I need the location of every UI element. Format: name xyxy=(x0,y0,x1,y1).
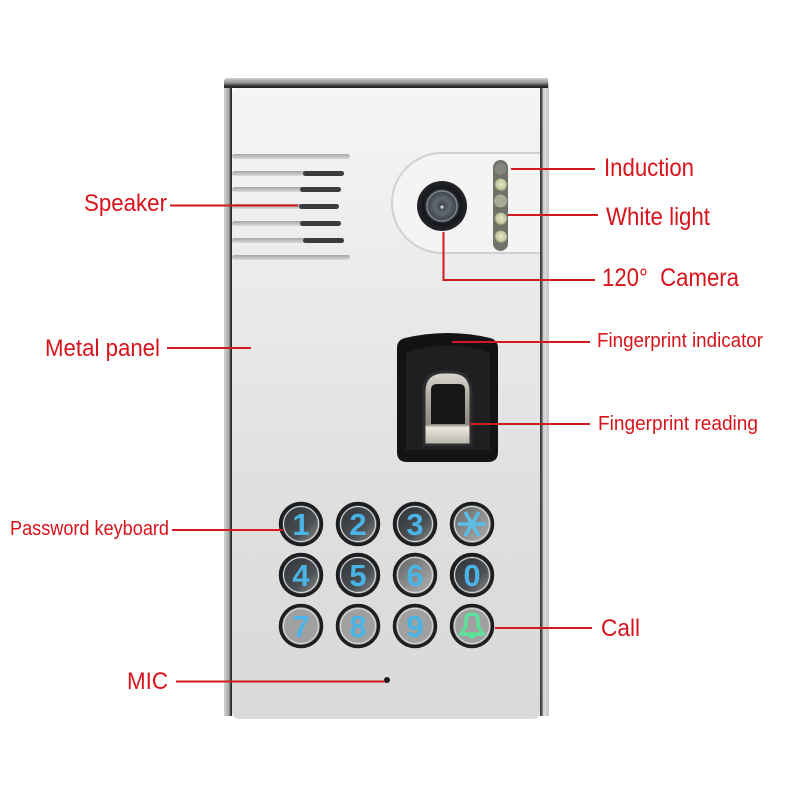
key 9: 9 xyxy=(406,609,424,644)
icon: camera lens xyxy=(417,181,467,231)
device housing frame xyxy=(224,78,549,716)
label: White light: White light xyxy=(606,203,710,231)
key 5 xyxy=(338,554,378,596)
camera bezel xyxy=(392,153,540,253)
metal panel xyxy=(232,88,540,719)
key 1 xyxy=(280,504,322,544)
fingerprint sensor xyxy=(424,372,471,445)
key call bell xyxy=(452,606,492,646)
label: Speaker: Speaker xyxy=(84,190,167,217)
key 0 xyxy=(452,554,492,596)
key 8: 8 xyxy=(349,609,367,644)
key 3 xyxy=(394,504,436,544)
password keypad xyxy=(280,504,492,646)
fingerprint reader xyxy=(397,333,498,462)
label: 120 degree camera: 120° Camera xyxy=(602,264,739,292)
speaker grille xyxy=(232,154,350,260)
label: Call: Call xyxy=(601,615,640,642)
key 7 xyxy=(280,606,322,646)
key 9 xyxy=(394,606,436,646)
LED strip xyxy=(493,160,508,251)
label: Fingerprint reading: Fingerprint reading xyxy=(598,413,758,435)
key 1: 1 xyxy=(292,507,310,542)
key 6: 6 xyxy=(406,558,424,593)
key star xyxy=(452,504,492,544)
icon: microphone hole xyxy=(384,677,390,683)
label: MIC: MIC xyxy=(127,668,168,695)
label: Metal panel: Metal panel xyxy=(45,335,160,362)
key 4: 4 xyxy=(292,558,310,593)
key 3: 3 xyxy=(406,507,424,542)
key 6 xyxy=(394,554,436,596)
key 5: 5 xyxy=(349,558,367,593)
label: Induction: Induction xyxy=(604,154,694,182)
key 2: 2 xyxy=(349,507,367,542)
key 7: 7 xyxy=(292,609,310,644)
key 0: 0 xyxy=(463,558,481,593)
key 8 xyxy=(338,606,378,646)
leader lines xyxy=(167,169,598,682)
key 4 xyxy=(280,554,322,596)
key 2 xyxy=(338,504,378,544)
label: Fingerprint indicator: Fingerprint indicator xyxy=(597,330,763,352)
label: Password keyboard: Password keyboard xyxy=(10,518,169,540)
camera module xyxy=(392,153,540,253)
